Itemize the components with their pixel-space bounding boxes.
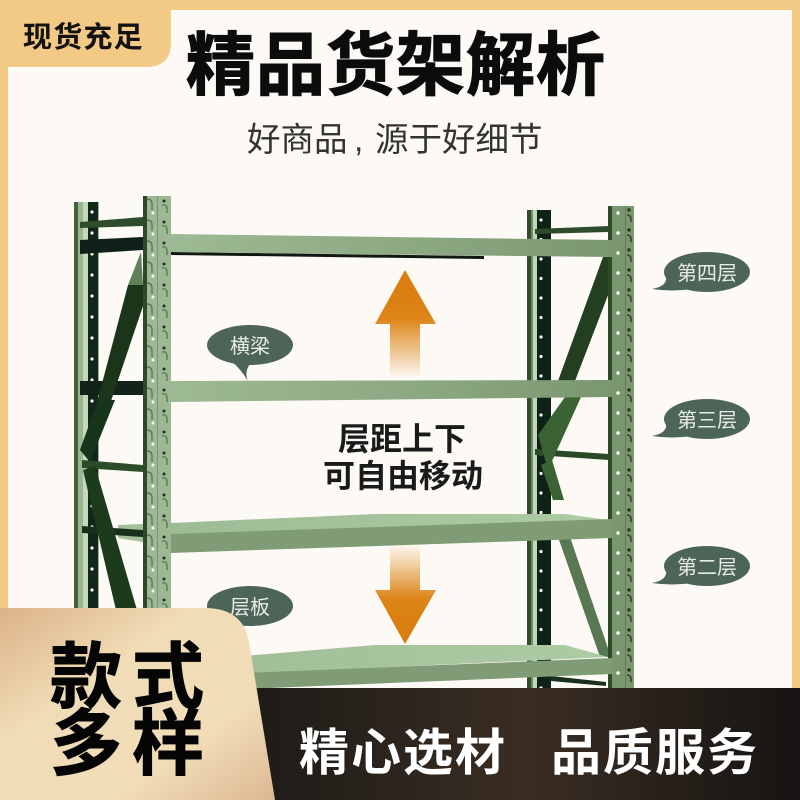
callout: 第二层 <box>652 546 750 586</box>
right rear upright <box>527 210 551 690</box>
left rear upright <box>74 202 99 632</box>
center caption <box>323 421 483 494</box>
shelf board: second level <box>171 514 612 553</box>
subtitle: 好商品 <box>247 122 348 159</box>
badge: 款式多样 <box>0 608 275 800</box>
subtitle: , <box>354 122 363 159</box>
callout: 第三层: 第三层 <box>677 409 737 432</box>
beam: third level <box>171 380 612 402</box>
bottom bar <box>255 688 800 800</box>
callout: 横梁 <box>207 325 293 381</box>
arrow down <box>375 544 436 644</box>
center caption: 层距上下 <box>338 421 466 457</box>
center caption: 可自由移动 <box>323 458 483 494</box>
callout: 第四层: 第四层 <box>677 262 737 285</box>
callout: 横梁: 横梁 <box>230 335 270 358</box>
corner tag: 现货充足 <box>23 21 144 54</box>
callout: 第二层: 第二层 <box>677 556 737 579</box>
left diagonals <box>80 252 143 610</box>
callout: 第三层 <box>652 399 750 439</box>
subtitle: 源于好细节 <box>375 122 542 159</box>
badge: 款式多样: 款式 <box>50 638 214 718</box>
bottom bar: 品质服务 <box>551 725 759 781</box>
shelf rack illustration <box>74 196 634 692</box>
callout: 第四层 <box>652 252 750 292</box>
arrow up <box>375 270 436 378</box>
beam: top level <box>171 234 612 259</box>
bottom bar: 精心选材 <box>299 725 507 781</box>
left front upright <box>143 196 171 636</box>
right diagonals <box>538 257 612 657</box>
badge: 款式多样: 多样 <box>50 705 214 785</box>
title: 精品货架解析 <box>186 27 606 104</box>
right front upright <box>608 206 634 690</box>
callout: 层板 <box>207 586 293 626</box>
shelf board: first level <box>171 645 612 692</box>
left braces <box>80 217 143 542</box>
corner tag <box>0 0 171 800</box>
callout: 层板: 层板 <box>230 596 270 619</box>
right braces <box>535 226 609 686</box>
